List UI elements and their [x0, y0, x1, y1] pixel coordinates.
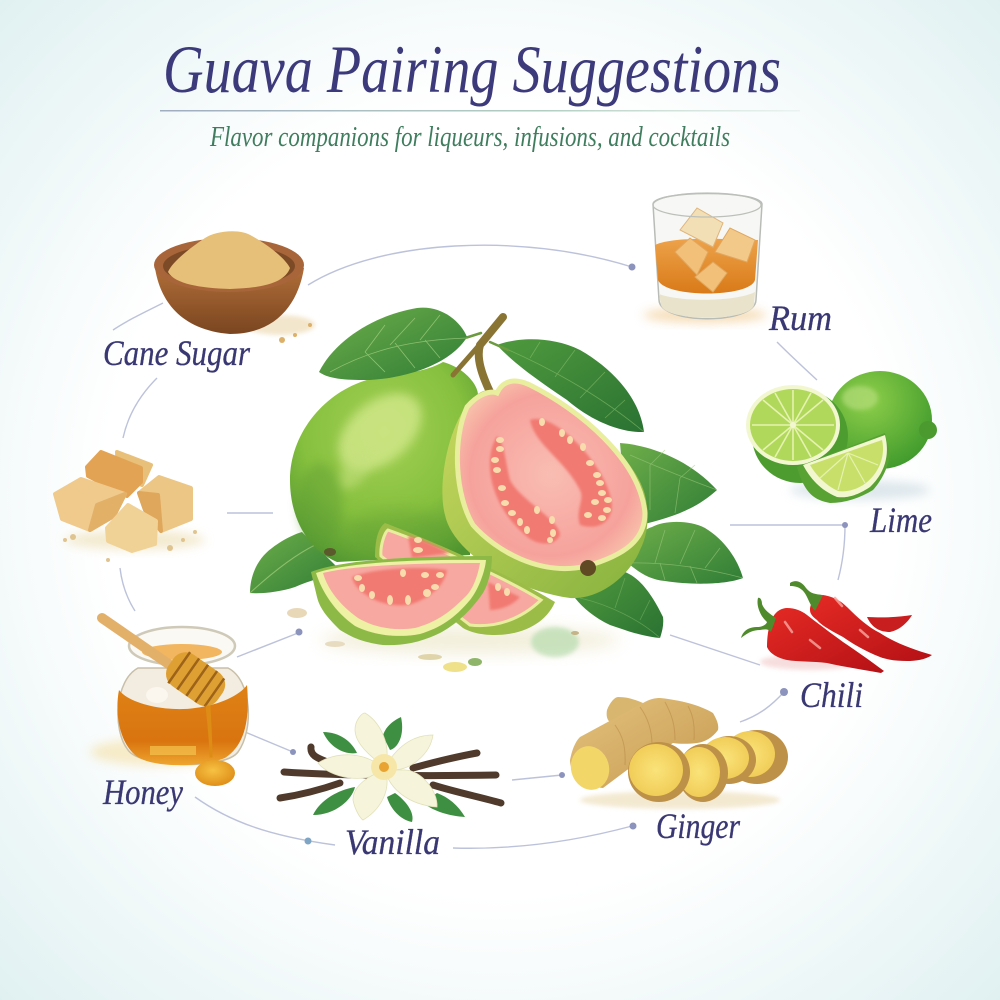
- icon: vanilla flower and pods: [280, 713, 501, 822]
- leaf: lower right: [628, 522, 743, 584]
- back chili: [867, 615, 912, 632]
- guava half: blossom end: [580, 560, 596, 576]
- splatter wash: [287, 608, 620, 672]
- title: Guava Pairing Suggestions: [163, 31, 781, 107]
- leaf: bottom: [575, 570, 663, 638]
- icon: honey jar: [90, 618, 248, 786]
- seed cavity right: [530, 419, 612, 527]
- icon: ginger: [566, 697, 788, 809]
- front wedge: [311, 556, 492, 645]
- label: Ginger: Ginger: [656, 806, 741, 846]
- icon: rum glass: [643, 193, 767, 323]
- label: Rum: Rum: [768, 298, 832, 338]
- guava half: flesh: [457, 381, 645, 569]
- icon: chili peppers: [741, 581, 932, 673]
- stem: [453, 317, 508, 392]
- connector lines: [113, 245, 848, 848]
- guava half: skin: [442, 379, 648, 598]
- icon: sugar cubes: [55, 452, 205, 562]
- seed cavity left: [490, 436, 560, 544]
- whole guava: [290, 362, 478, 562]
- label: Lime: Lime: [869, 500, 932, 540]
- ginger slices: [628, 730, 788, 802]
- leaf: top left: [319, 308, 467, 380]
- label: Cane Sugar: Cane Sugar: [103, 333, 251, 373]
- honey dipper: [102, 618, 231, 712]
- subtitle: Flavor companions for liqueurs, infusions, and cocktails: [209, 122, 730, 153]
- front chili: [767, 608, 884, 673]
- icon: limes: [746, 371, 937, 503]
- leaf: top right: [497, 339, 644, 432]
- back wedge: [375, 523, 555, 635]
- leaf: right: [620, 443, 717, 525]
- central guava illustration: [250, 308, 743, 672]
- icon: cane sugar bowl: [154, 231, 315, 343]
- label: Chili: Chili: [800, 675, 863, 715]
- label: Vanilla: Vanilla: [345, 822, 440, 862]
- label: Honey: Honey: [102, 772, 183, 812]
- leaf: left: [250, 532, 340, 593]
